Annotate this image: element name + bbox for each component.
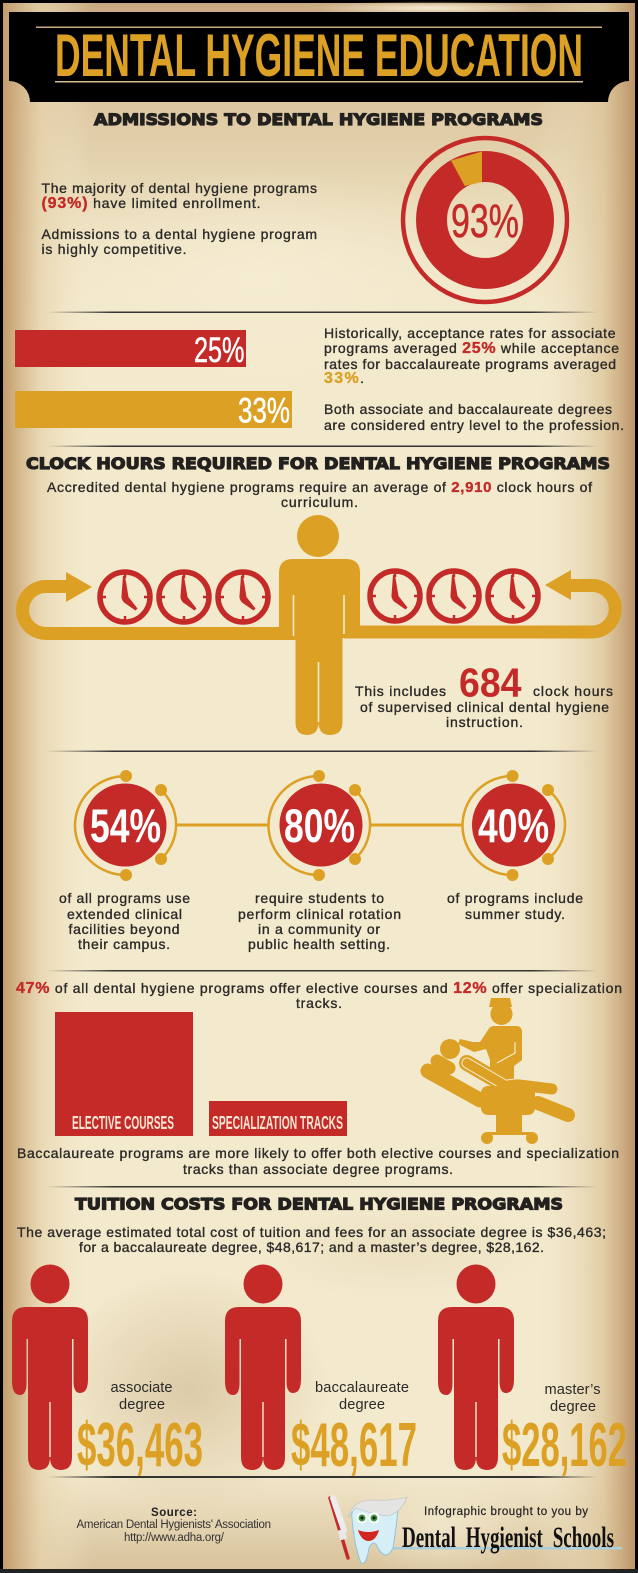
text: acceptance rates [324,325,624,433]
heading: tuition: TUITION COSTS FOR DENTAL HYGIENE PROGRAMS [75,1194,563,1214]
bar: specialization tracks [209,1101,347,1136]
text: 47% and 12%: tracks. [296,995,342,1011]
bar: elective courses [55,1012,193,1136]
text: 684 clock hours: This includes [355,683,446,699]
text: 54% caption [59,890,190,952]
source: http://www.adha.org/ [124,1532,225,1544]
text: 54% caption: extended clinical [67,906,182,922]
cost: master: master’s [544,1382,600,1398]
icon: person master [438,1264,514,1470]
connectors [176,824,463,826]
cost: baccalaureate [291,1380,417,1480]
icon: toothbrush [330,1498,348,1558]
text: 2,910 hours: Accredited dental hygiene programs require an average of 2,910 clock hours of [47,479,592,496]
icon: person associate [12,1264,88,1470]
icon: right arrow band [344,570,615,632]
text: limited enrollment: The majority of dental hygiene programs [42,180,317,196]
text: 684 clock hours: 684 [459,660,522,706]
text: 40% caption [447,890,583,922]
text: 2,910 hours [47,479,592,510]
text: 54% caption: facilities beyond [68,921,180,937]
text: 54% caption: of all programs use [59,890,190,906]
source: Source: [151,1507,197,1519]
cost: baccalaureate: baccalaureate [315,1380,409,1396]
cost: baccalaureate: degree [339,1397,385,1413]
header banner [9,12,629,102]
stat: 54%: 54% [90,799,161,852]
source: American Dental Hygienists' Association [76,1519,271,1531]
bar: elective courses: ELECTIVE COURSES [72,1113,174,1133]
text: baccalaureate programs [17,1145,619,1177]
text: 47% and 12%: 47% of all dental hygiene programs offer elective courses and 12% offer specialization [16,980,622,997]
text: acceptance rates: 33%. [324,370,364,387]
cost: associate: degree [119,1397,165,1413]
text: 80% caption: public health setting. [248,936,390,952]
icon: clocks right [370,571,538,621]
text: acceptance rates: are considered entry level to the profession. [324,417,624,433]
text: 684 clock hours: clock hours [533,683,613,699]
text: 80% caption: in a community or [258,921,380,937]
text: 54% caption: their campus. [78,936,170,952]
icon: person [279,515,360,735]
text: limited enrollment: (93%) have limited enrollment. [42,195,260,212]
cost: baccalaureate: $48,617 [291,1411,417,1480]
stat: 80%: 80% [284,799,355,852]
text: baccalaureate programs: Baccalaureate programs are more likely to offer both elective courses and specialization [17,1145,619,1161]
donut chart: 93%: 93% [451,194,519,247]
donut chart: 93% [403,138,567,302]
logo: dental hygienist schools [330,1497,622,1563]
bar: 33% [15,391,292,430]
panel: program statistics [59,770,583,952]
text: average cost: The average estimated total cost of tuition and fees for an associate degree is $36,463; [17,1224,606,1240]
text: 40% caption: summer study. [465,906,565,922]
stat: 40%: 40% [478,799,549,852]
panel: elective courses [16,980,622,1177]
cost: associate: associate [110,1380,172,1396]
panel: admissions [42,110,567,302]
text: 80% caption: perform clinical rotation [238,906,401,922]
text: acceptance rates: Historically, acceptance rates for associate [324,325,616,341]
text: 47% and 12% [16,980,622,1011]
panel: tuition [12,1194,627,1480]
cost: associate [77,1380,203,1480]
text: limited enrollment: is highly competitive. [42,241,186,257]
bar: 25% [15,330,246,370]
icon: person baccalaureate [225,1264,301,1470]
bar: specialization tracks: SPECIALIZATION TRACKS [212,1113,343,1133]
stat: 40% [462,770,565,881]
text: limited enrollment [42,180,317,257]
text: acceptance rates: rates for baccalaureate programs averaged [324,356,616,372]
heading: clock hours: CLOCK HOURS REQUIRED FOR DENTAL HYGIENE PROGRAMS [26,454,610,473]
stat: 80% [268,770,370,881]
text: 40% caption: of programs include [447,890,583,906]
text: 684 clock hours [355,660,613,730]
text: 80% caption: require students to [255,890,384,906]
cost: associate: $36,463 [77,1411,203,1480]
text: acceptance rates: Both associate and baccalaureate degrees [324,401,612,417]
cost: master [502,1382,627,1480]
stat: 54% [75,770,176,881]
cost: master: degree [550,1399,596,1415]
text: 80% caption [238,890,401,952]
bar: 25%: 25% [194,331,244,370]
source [76,1507,271,1544]
text: average cost: for a baccalaureate degree, $48,617; and a master’s degree, $28,162. [79,1239,544,1255]
text: limited enrollment: Admissions to a dental hygiene program [42,226,317,242]
bar: 33%: 33% [238,392,290,430]
icon: dentist and patient [428,998,568,1144]
text: 684 clock hours: instruction. [446,714,523,730]
text: acceptance rates: programs averaged 25% while acceptance [324,340,619,357]
icon: tooth [348,1497,407,1563]
icon: clocks left [100,572,268,622]
icon: underline [390,1547,622,1550]
heading: admissions: ADMISSIONS TO DENTAL HYGIENE PROGRAMS [94,110,543,129]
icon: left arrow band [22,572,293,634]
text: brought to you by: Infographic brought to you by [424,1506,588,1518]
text: 2,910 hours: curriculum. [281,494,358,510]
panel: clock hours [22,454,615,735]
panel: acceptance rates [15,325,624,433]
text: average cost [17,1224,606,1255]
text: baccalaureate programs: tracks than associate degree programs. [183,1161,453,1177]
text: 684 clock hours: of supervised clinical dental hygiene [360,699,609,715]
